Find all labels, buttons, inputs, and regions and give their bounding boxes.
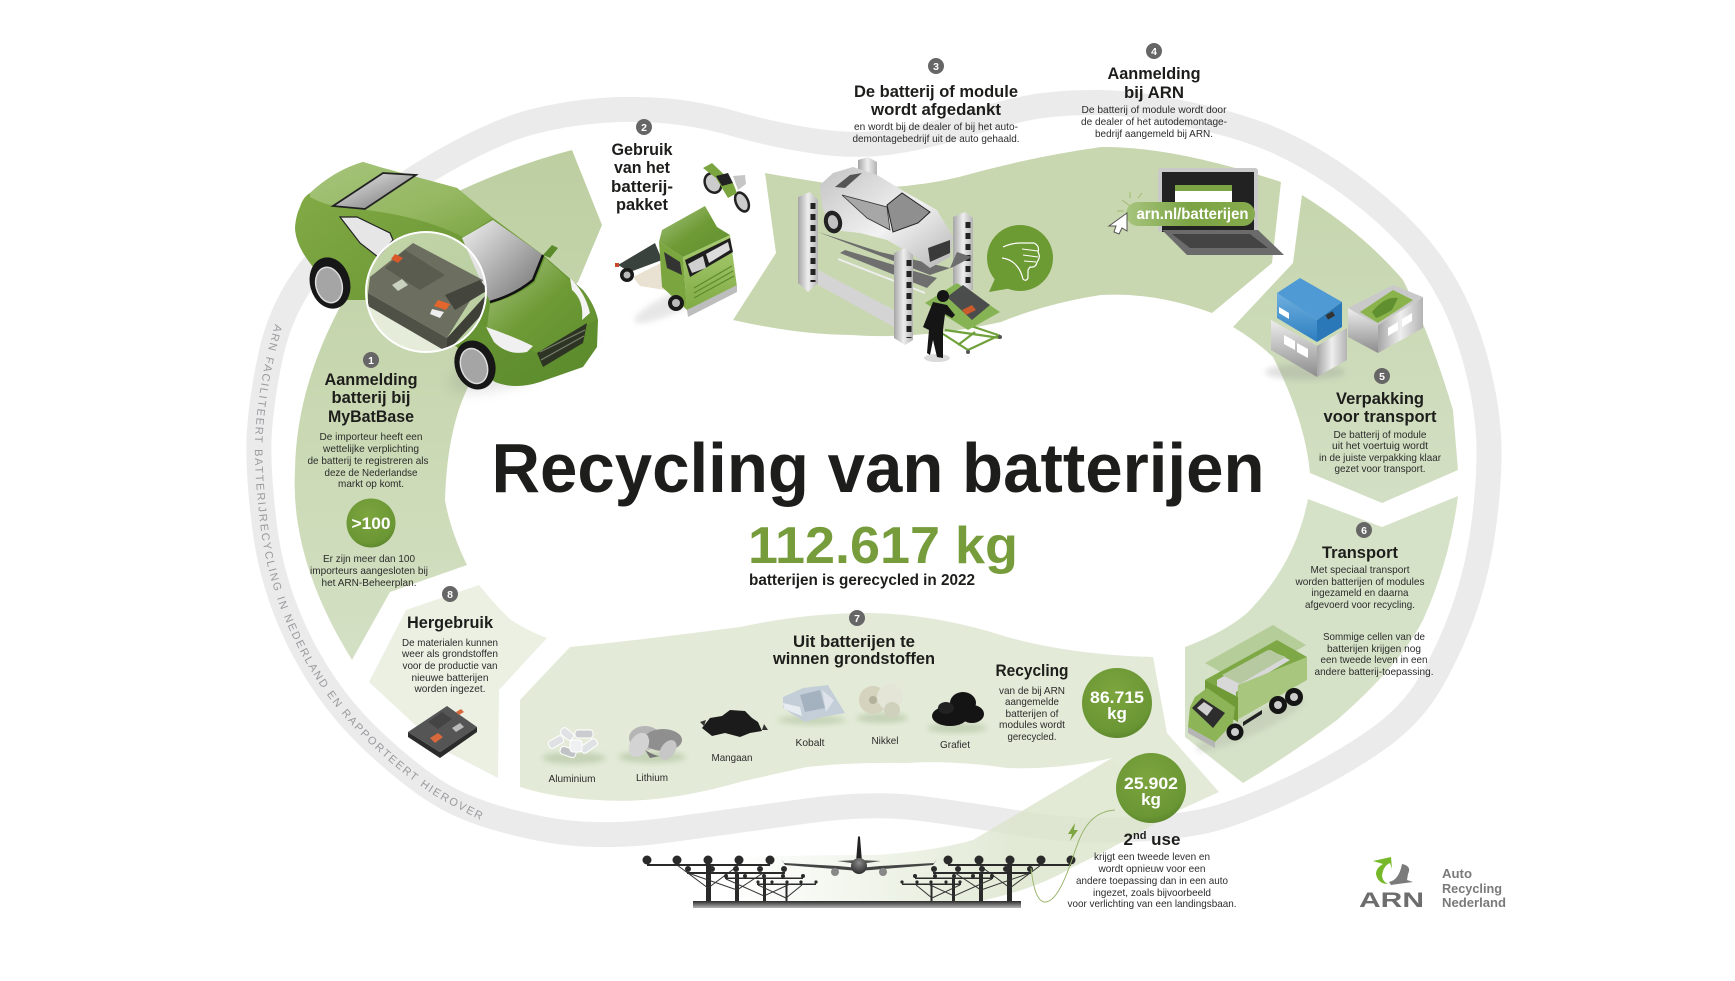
- second use text: ingezet, zoals bijvoorbeeld: [1093, 887, 1211, 899]
- title: Recycling van batterijen: [492, 429, 1264, 507]
- importers note: importeurs aangesloten bij: [310, 565, 428, 577]
- step 2 text: [611, 119, 673, 214]
- stat badge: 86.715 kg: [1082, 668, 1152, 738]
- illustration: green car with battery: [295, 162, 598, 406]
- importers note: Er zijn meer dan 100: [323, 553, 415, 565]
- second use text: use: [1146, 830, 1180, 849]
- step 1 text: [308, 352, 428, 490]
- panel 7 branch: second use: [720, 758, 1173, 905]
- step 6 text: ingezameld en daarna: [1312, 587, 1409, 599]
- step 6 text: Transport: [1322, 543, 1398, 562]
- step 8 text: weer als grondstoffen: [401, 648, 498, 660]
- total recycled figure: 112.617 kg: [748, 517, 1018, 575]
- recycling text: [996, 661, 1068, 743]
- illustration: runway lights right: [900, 856, 1076, 903]
- step 7 heading: 7: [854, 613, 860, 625]
- recycling text: batterijen of: [1006, 708, 1059, 720]
- step 3 text: [852, 58, 1020, 145]
- step 1 text: Aanmelding: [324, 370, 418, 389]
- illustration: scissor cart with battery: [925, 283, 1002, 354]
- step 4 text: bij ARN: [1124, 83, 1184, 102]
- battery lens: [366, 232, 488, 352]
- step 1 text: De importeur heeft een: [320, 431, 423, 443]
- step 5 text: uit het voertuig wordt: [1332, 440, 1428, 452]
- second life note: Sommige cellen van de: [1323, 631, 1425, 643]
- illustration: mechanic silhouette: [923, 290, 955, 362]
- step 4 text: [1081, 43, 1227, 140]
- step 8 text: De materialen kunnen: [402, 637, 498, 649]
- recycling text: gerecycled.: [1008, 731, 1056, 743]
- step 6 text: Met speciaal transport: [1310, 564, 1410, 576]
- step 5 text: voor transport: [1324, 407, 1437, 426]
- step 4 text: de dealer of het autodemontage-: [1081, 116, 1227, 128]
- illustration: runway: [693, 901, 1021, 908]
- stat badge: more than 100 importers: [346, 498, 396, 548]
- stat badge: 25.902 kg: [1116, 753, 1186, 823]
- step 3 text: demontagebedrijf uit de auto gehaald.: [852, 133, 1020, 145]
- step 1 text: wettelijke verplichting: [322, 443, 419, 455]
- panel 1: registration: [295, 150, 602, 660]
- illustration: runway lights left: [642, 856, 818, 903]
- step 5 text: Verpakking: [1336, 389, 1424, 408]
- step 5 text: 5: [1379, 371, 1385, 383]
- importers note: [310, 553, 428, 589]
- panel 7: raw materials: [520, 613, 1219, 813]
- icon: thumbs down speech bubble: [987, 225, 1053, 292]
- step 1 text: markt op komt.: [338, 478, 404, 490]
- step 3 text: wordt afgedankt: [870, 100, 1001, 119]
- step 2 text: batterij-: [611, 177, 673, 196]
- second use text: 2: [1124, 830, 1133, 849]
- step 7 heading: [772, 610, 935, 668]
- mineral: nikkel: [856, 684, 908, 723]
- recycling text: van de bij ARN: [999, 685, 1065, 697]
- step 2 text: pakket: [616, 195, 668, 214]
- material labels: Nikkel: [872, 735, 898, 747]
- grey cycle ring: [259, 102, 1489, 835]
- second use text: nd: [1133, 830, 1146, 842]
- mineral: mangaan: [700, 710, 768, 737]
- illustration: laptop with url: arn.nl/batterijen: [1136, 206, 1248, 223]
- logo: ARN: [1359, 857, 1506, 912]
- panel 5: packaging: [1233, 195, 1458, 503]
- step 8 text: [401, 586, 498, 695]
- stat badge: 25.902 kg: kg: [1141, 790, 1161, 809]
- step 5 text: De batterij of module: [1334, 429, 1427, 441]
- second use text: krijgt een tweede leven en: [1094, 851, 1210, 863]
- step 7 heading: winnen grondstoffen: [772, 649, 935, 668]
- step 3 text: en wordt bij de dealer of bij het auto-: [854, 121, 1018, 133]
- material labels: Kobalt: [796, 737, 825, 749]
- illustration: laptop with url: [1109, 168, 1284, 255]
- logo: ARN: Auto: [1442, 866, 1472, 881]
- step 4 text: Aanmelding: [1108, 64, 1200, 83]
- recycling text: Recycling: [996, 661, 1068, 680]
- step 1 text: MyBatBase: [328, 407, 414, 426]
- illustration: transport truck: [1188, 625, 1309, 759]
- material labels: Lithium: [636, 772, 668, 784]
- second life note: een tweede leven in een: [1320, 654, 1428, 666]
- step 8 text: worden ingezet.: [414, 683, 486, 695]
- step 4 text: De batterij of module wordt door: [1082, 104, 1227, 116]
- step 6 text: 6: [1361, 525, 1367, 537]
- second use text: voor verlichting van een landingsbaan.: [1068, 898, 1236, 910]
- illustration: airplane: [781, 836, 937, 876]
- second use text: andere toepassing dan in een auto: [1076, 875, 1228, 887]
- step 7 heading: Uit batterijen te: [793, 632, 915, 651]
- step 1 text: de batterij te registreren als: [308, 455, 428, 467]
- step 4 text: 4: [1151, 46, 1157, 58]
- step 5 text: in de juiste verpakking klaar: [1319, 452, 1441, 464]
- panel 8: reuse: [369, 585, 547, 778]
- step 6 text: worden batterijen of modules: [1295, 576, 1424, 588]
- illustration: car lift with grey car: [798, 157, 973, 345]
- logo: ARN: ARN: [1359, 889, 1424, 912]
- illustration: battery pack: [408, 706, 477, 758]
- step 1 text: batterij bij: [332, 388, 410, 407]
- second life note: batterijen krijgen nog: [1327, 643, 1421, 655]
- step 3 text: 3: [933, 61, 939, 73]
- importers note: het ARN-Beheerplan.: [322, 577, 416, 589]
- step 2 text: 2: [641, 122, 647, 134]
- stat badge: 25.902 kg: 25.902: [1124, 774, 1178, 793]
- logo: ARN: Recycling: [1442, 881, 1502, 896]
- material labels: Aluminium: [548, 773, 596, 785]
- second life note: [1314, 631, 1434, 678]
- stat badge: 86.715 kg: 86.715: [1090, 688, 1144, 707]
- step 2 text: van het: [614, 158, 670, 177]
- stat badge: 86.715 kg: kg: [1107, 704, 1127, 723]
- material labels: Grafiet: [940, 739, 970, 751]
- step 4 text: bedrijf aangemeld bij ARN.: [1095, 128, 1213, 140]
- recycling text: modules wordt: [999, 719, 1065, 731]
- step 6 text: afgevoerd voor recycling.: [1305, 599, 1415, 611]
- mineral: grafiet: [927, 692, 987, 733]
- panel 6: transport: [1185, 496, 1458, 783]
- step 8 text: 8: [447, 589, 453, 601]
- material labels: Mangaan: [712, 752, 753, 764]
- material labels: [548, 735, 970, 785]
- ring caption: ARN FACILITEERT BATTERIJRECYCLING IN NEDERLAND EN RAPPORTEERT HIEROVER: [254, 324, 482, 820]
- step 1 text: 1: [368, 355, 374, 367]
- step 6 text: [1295, 522, 1424, 611]
- second life note: andere batterij-toepassing.: [1314, 666, 1434, 678]
- step 2 text: Gebruik: [612, 140, 673, 159]
- illustration: battery crates: [1265, 278, 1423, 380]
- second use text: wordt opnieuw voor een: [1098, 863, 1206, 875]
- second use text: [1068, 830, 1236, 910]
- connector line with energy bolt: [1031, 810, 1115, 902]
- total recycled caption: batterijen is gerecycled in 2022: [749, 572, 975, 589]
- illustration: tractor truck: [615, 206, 737, 330]
- panel 3: wave for steps 3 and 4: [733, 147, 1281, 336]
- mineral: aluminium: [542, 726, 606, 764]
- step 1 text: deze de Nederlandse: [324, 467, 418, 479]
- stat badge: more than 100 importers: >100: [352, 514, 390, 533]
- recycling text: aangemelde: [1005, 696, 1059, 708]
- step 8 text: voor de productie van: [402, 660, 498, 672]
- mineral: kobalt: [778, 685, 846, 725]
- mineral: lithium: [618, 726, 686, 763]
- illustration: motorbike: [702, 163, 752, 214]
- step 8 text: Hergebruik: [407, 613, 494, 632]
- step 5 text: [1319, 368, 1441, 475]
- step 3 text: De batterij of module: [854, 82, 1018, 101]
- logo: ARN: Nederland: [1442, 895, 1506, 910]
- step 8 text: nieuwe batterijen: [412, 672, 489, 684]
- step 5 text: gezet voor transport.: [1334, 463, 1426, 475]
